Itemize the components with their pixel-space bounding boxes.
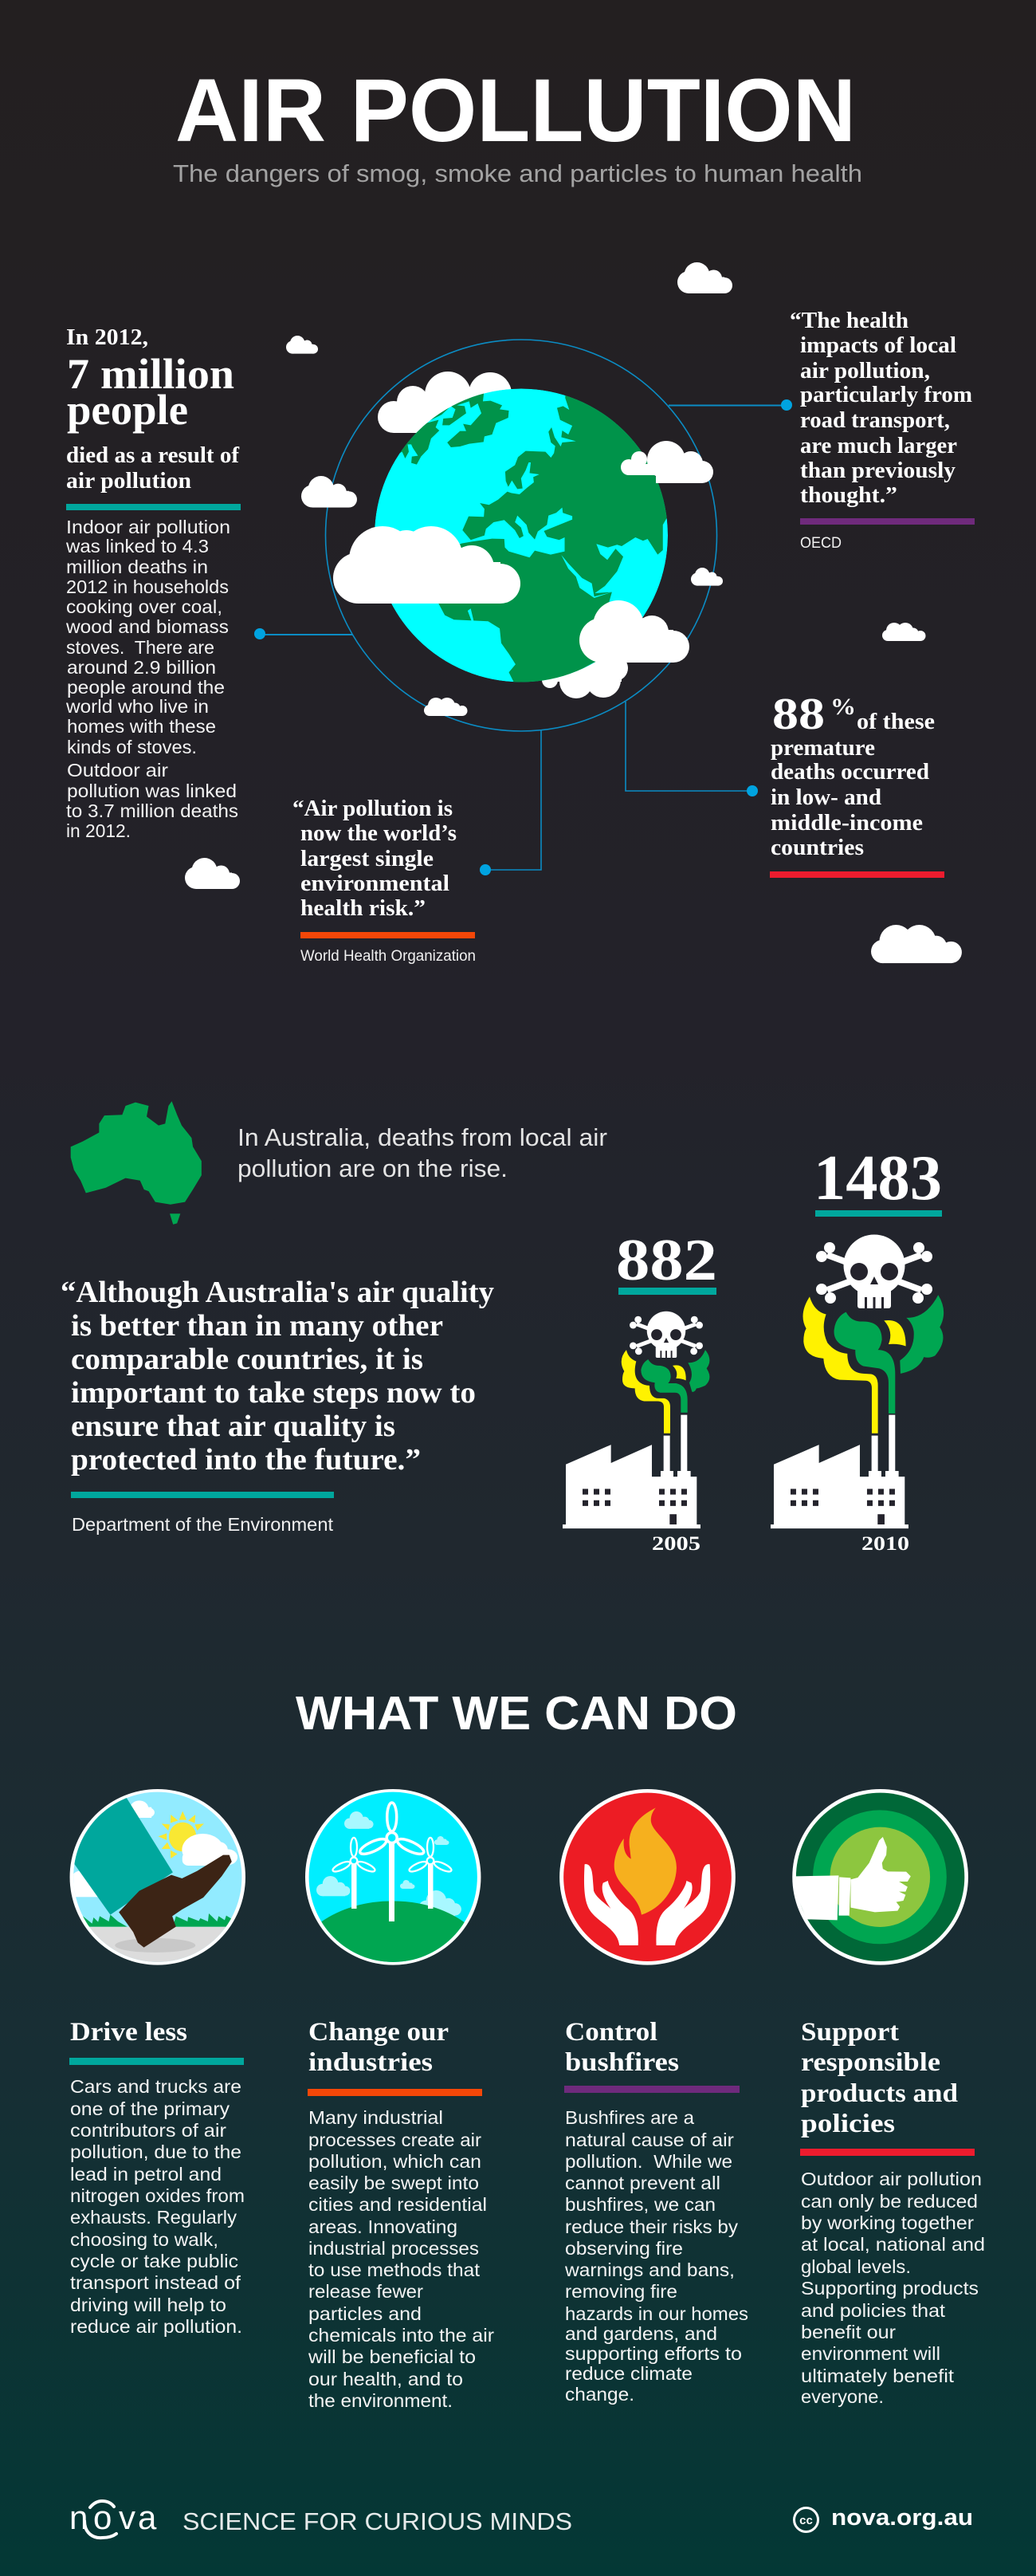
earth	[375, 383, 680, 686]
column: control bushfires: observing fire	[565, 2238, 683, 2259]
column: support responsible products and policies: environment will	[801, 2343, 940, 2364]
stat block: 88 percent: of these	[857, 710, 935, 734]
subtitle: The dangers of smog, smoke and particles to human health	[173, 159, 862, 187]
column: change our industries: industrial processes	[308, 2238, 479, 2259]
stat block: 88 percent	[770, 690, 944, 878]
quote: OECD: impacts of local	[800, 333, 956, 358]
icon: change our industries, wind turbines	[305, 1789, 481, 1965]
factory 2005 with smoke and skull	[563, 1312, 709, 1528]
cloud, small right	[691, 568, 723, 586]
cloud, upper right front	[621, 441, 713, 483]
map of Australia	[71, 1101, 202, 1225]
icon: support responsible products, thumbs up	[792, 1789, 968, 1965]
column: change our industries: particles and	[308, 2303, 422, 2324]
column: change our industries: release fewer	[308, 2281, 423, 2302]
cloud, bottom left	[185, 858, 240, 889]
stat block: 88 percent: countries	[771, 836, 864, 860]
stat block: 88 percent: premature	[771, 736, 875, 761]
column: drive less: exhausts. Regularly	[70, 2207, 237, 2228]
column: change our industries: Change our	[308, 2018, 449, 2047]
footer url: nova.org.au	[831, 2505, 973, 2531]
column: control bushfires: cannot prevent all	[565, 2173, 720, 2193]
quote: World Health Organization: World Health Organization	[300, 948, 476, 965]
column: support responsible products and policies: policies	[801, 2110, 895, 2138]
column: control bushfires: removing fire	[565, 2281, 677, 2302]
column: change our industries	[308, 2018, 494, 2411]
body text: indoor and outdoor deaths: Indoor air pollution	[66, 517, 230, 537]
column: drive less: nitrogen oxides from	[70, 2185, 245, 2206]
globe illustration	[286, 336, 723, 731]
quote: Department of the Environment: is better than in many other	[71, 1309, 443, 1343]
column: drive less: reduce air pollution.	[70, 2316, 242, 2337]
Australia intro text: In Australia, deaths from local air	[237, 1123, 607, 1151]
column: support responsible products and policies: at local, national and	[801, 2234, 985, 2255]
icon: creative commons	[794, 2508, 818, 2532]
body text: indoor and outdoor deaths: stoves. There are	[66, 637, 214, 658]
year label 2005: 2005	[652, 1533, 700, 1555]
column: change our industries: areas. Innovating	[308, 2216, 457, 2237]
column: support responsible products and policies: everyone.	[801, 2386, 884, 2407]
factory 2010 with smoke and skull	[771, 1234, 944, 1528]
quote: World Health Organization: “Air pollution is	[292, 796, 453, 821]
column: drive less: transport instead of	[70, 2272, 241, 2293]
quote: OECD: thought.”	[800, 483, 897, 508]
quote: Department of the Environment: important to take steps now to	[71, 1376, 476, 1410]
column: control bushfires: natural cause of air	[565, 2130, 734, 2150]
column: drive less: lead in petrol and	[70, 2164, 222, 2185]
column: support responsible products and policies: products and	[801, 2079, 958, 2108]
quote: Department of the Environment	[61, 1276, 494, 1535]
column: support responsible products and policies: global levels.	[801, 2256, 911, 2277]
body text: indoor and outdoor deaths: wood and biomass	[65, 616, 229, 637]
column: drive less: driving will help to	[70, 2295, 226, 2315]
column: drive less: contributors of air	[70, 2120, 226, 2141]
column: support responsible products and policies: can only be reduced	[801, 2191, 978, 2212]
column: change our industries: cities and residential	[308, 2194, 487, 2215]
number: 1483 deaths: 1483	[814, 1143, 942, 1213]
column: support responsible products and policies: responsible	[801, 2048, 940, 2077]
Australia intro text	[237, 1123, 607, 1182]
cloud, right	[882, 623, 926, 641]
column: control bushfires: warnings and bans,	[564, 2259, 735, 2280]
column: support responsible products and policies: benefit our	[801, 2322, 896, 2342]
icon: control bushfires, hands and flame	[559, 1789, 736, 1965]
stat block: 88 percent: in low- and	[771, 785, 881, 810]
column: drive less: one of the primary	[70, 2098, 230, 2119]
cloud, lower right front	[579, 600, 689, 663]
footer logo: nova: nova	[69, 2499, 157, 2536]
column: control bushfires: hazards in our homes	[565, 2303, 748, 2324]
quote: OECD: particularly from	[800, 383, 972, 407]
column: control bushfires	[564, 2018, 748, 2405]
body text: indoor and outdoor deaths: cooking over coal,	[66, 596, 222, 617]
cloud, large left front	[333, 526, 520, 604]
stat block: 7 million people: died as a result of	[66, 443, 240, 468]
column: drive less: Cars and trucks are	[70, 2076, 241, 2097]
stat block: 88 percent: 88	[772, 690, 825, 739]
quote: Department of the Environment: ensure that air quality is	[71, 1410, 395, 1443]
cloud, small top	[286, 336, 318, 354]
stat block: 7 million people: air pollution	[66, 469, 191, 494]
stat block: 7 million people: people	[67, 386, 188, 434]
cloud, bottom right	[871, 925, 962, 963]
body text: indoor and outdoor deaths: kinds of stoves.	[67, 737, 197, 757]
stat block: 7 million people: In 2012,	[66, 325, 148, 350]
stat block: 88 percent: deaths occurred	[771, 760, 929, 785]
cloud behind globe, bottom	[542, 650, 628, 698]
icon: drive less, walking shoe	[66, 1788, 246, 1967]
column: support responsible products and policies: Outdoor air pollution	[801, 2169, 982, 2189]
body text: indoor and outdoor deaths: around 2.9 billion	[67, 657, 216, 678]
column: change our industries: our health, and to	[308, 2369, 463, 2389]
quote: World Health Organization: environmental	[300, 871, 449, 896]
column: drive less: cycle or take public	[70, 2251, 238, 2271]
column: control bushfires: and gardens, and	[565, 2323, 717, 2344]
body text: indoor and outdoor deaths: pollution was linked	[67, 781, 237, 801]
quote: OECD: than previously	[800, 458, 956, 483]
cloud, small bottom	[424, 698, 467, 716]
column: control bushfires: reduce their risks by	[565, 2216, 739, 2237]
column: change our industries: the environment.	[308, 2390, 453, 2411]
column: control bushfires: bushfires	[565, 2048, 679, 2077]
body text: indoor and outdoor deaths: Outdoor air	[67, 760, 168, 781]
quote: OECD: “The health	[790, 309, 908, 333]
connector: left text to globe	[254, 628, 352, 639]
footer tagline: SCIENCE FOR CURIOUS MINDS	[182, 2507, 572, 2535]
icon: creative commons: cc	[799, 2514, 813, 2527]
quote: Department of the Environment: Department of the Environment	[72, 1514, 334, 1535]
heading: what we can do: WHAT WE CAN DO	[296, 1687, 737, 1740]
column: change our industries: to use methods that	[308, 2259, 481, 2280]
connector: right quote to globe	[669, 399, 792, 411]
column: support responsible products and policies: ultimately benefit	[801, 2366, 955, 2386]
stat block: 7 million people: 7 million	[67, 350, 234, 398]
column: control bushfires: reduce climate	[565, 2363, 693, 2384]
column: control bushfires: Control	[565, 2018, 657, 2047]
column: support responsible products and policies	[800, 2018, 985, 2407]
connector: WHO quote to globe	[480, 730, 541, 875]
column: change our industries: industries	[308, 2048, 433, 2077]
column: drive less	[69, 2018, 245, 2337]
teal divider	[66, 504, 241, 510]
quote: Department of the Environment: comparable countries, it is	[71, 1343, 423, 1376]
column: change our industries: chemicals into the air	[308, 2325, 494, 2346]
Australia intro text: pollution are on the rise.	[237, 1154, 508, 1182]
body text: indoor and outdoor deaths: million deaths in	[66, 556, 208, 577]
column: drive less: choosing to walk,	[70, 2229, 218, 2250]
title: AIR POLLUTION	[175, 61, 856, 160]
orbit ring	[325, 340, 717, 731]
cloud, top right	[677, 262, 732, 293]
column: change our industries: easily be swept into	[308, 2173, 479, 2193]
body text: indoor and outdoor deaths: was linked to 4.3	[65, 536, 209, 556]
column: change our industries: pollution, which can	[308, 2151, 481, 2172]
quote: World Health Organization	[292, 796, 476, 965]
body text: indoor and outdoor deaths: homes with these	[67, 716, 216, 737]
body text: indoor and outdoor deaths: in 2012.	[66, 820, 131, 841]
quote: OECD	[790, 309, 975, 552]
column: support responsible products and policies: by working together	[801, 2212, 974, 2233]
stat block: 88 percent: middle-income	[771, 811, 923, 836]
body text: indoor and outdoor deaths: to 3.7 million deaths	[66, 800, 238, 821]
column: change our industries: Many industrial	[308, 2107, 443, 2128]
body text: indoor and outdoor deaths: people around the	[67, 677, 225, 698]
year label 2010: 2010	[861, 1533, 909, 1555]
stat block: 7 million people	[66, 325, 240, 494]
quote: OECD: air pollution,	[800, 359, 930, 383]
body text: indoor and outdoor deaths: world who live in	[65, 696, 209, 717]
connector: 88 percent to globe	[626, 702, 758, 796]
column: support responsible products and policies: and policies that	[801, 2300, 946, 2321]
column: change our industries: processes create air	[308, 2130, 481, 2150]
body text: indoor and outdoor deaths: 2012 in households	[66, 576, 229, 597]
quote: World Health Organization: health risk.”	[300, 896, 426, 921]
column: control bushfires: Bushfires are a	[565, 2107, 694, 2128]
cloud behind globe, top left	[378, 372, 512, 433]
quote: World Health Organization: now the world’s	[300, 821, 457, 846]
column: control bushfires: bushfires, we can	[565, 2194, 716, 2215]
column: drive less: Drive less	[70, 2018, 187, 2047]
column: support responsible products and policies: Supporting products	[801, 2278, 979, 2299]
stat block: 88 percent: %	[830, 694, 856, 720]
number: 882 deaths: 882	[616, 1228, 717, 1293]
quote: OECD: road transport,	[800, 408, 950, 433]
column: drive less: pollution, due to the	[70, 2141, 241, 2162]
quote: World Health Organization: largest single	[300, 847, 434, 871]
column: control bushfires: change.	[565, 2384, 634, 2405]
quote: Department of the Environment: protected into the future.”	[71, 1443, 421, 1477]
column: change our industries: will be beneficial to	[308, 2346, 476, 2367]
column: control bushfires: pollution. While we	[565, 2151, 732, 2172]
column: support responsible products and policies: Support	[801, 2018, 899, 2047]
quote: Department of the Environment: “Although Australia's air quality	[61, 1276, 494, 1309]
column: control bushfires: supporting efforts to	[565, 2343, 742, 2364]
quote: OECD: are much larger	[800, 434, 957, 458]
quote: OECD: OECD	[800, 535, 842, 552]
body text: indoor and outdoor deaths	[65, 517, 238, 841]
cloud, small left	[301, 476, 357, 508]
